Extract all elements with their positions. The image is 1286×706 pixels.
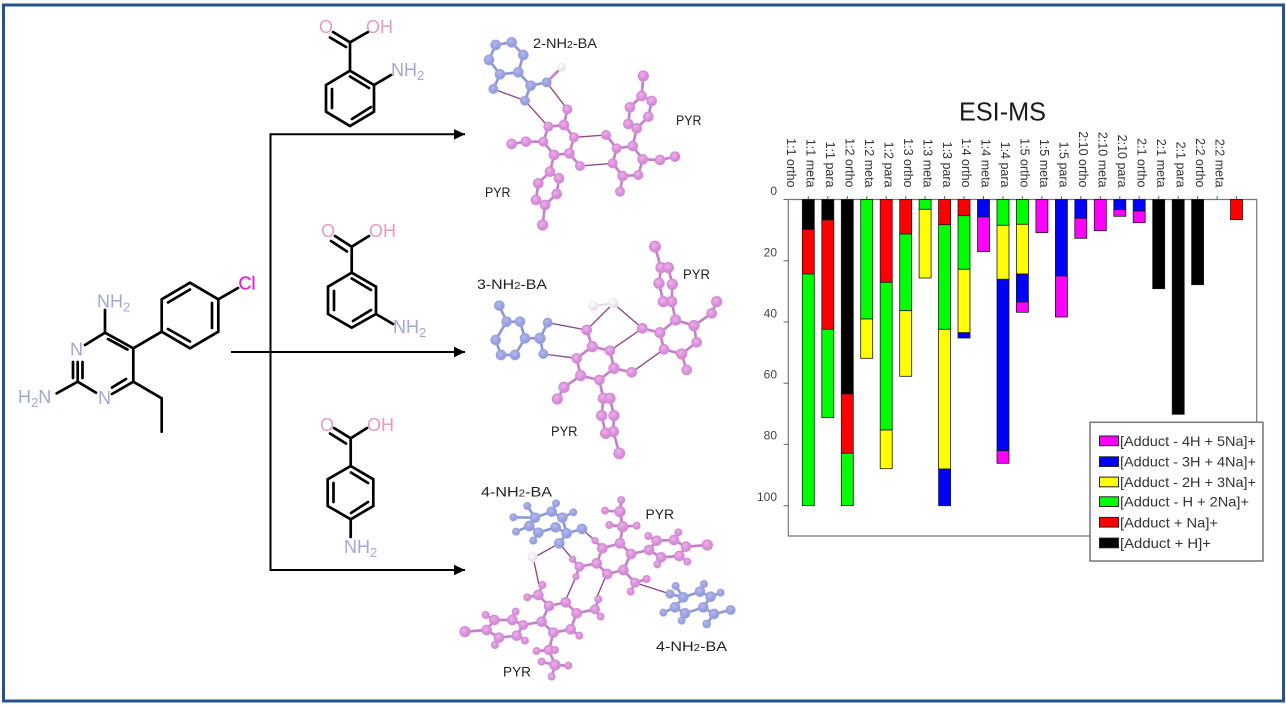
x axis labels: 2:1 meta [1154, 139, 1168, 188]
label: H2N: N [38, 387, 51, 407]
model: 3-NH2-BA with PYR dimer [491, 241, 722, 459]
label: NH2: 2 [417, 68, 424, 83]
chart: stacked bars ESI-MS [757, 131, 1257, 536]
x axis labels: 1:4 meta [979, 139, 993, 188]
label: PYR: PYR [551, 423, 578, 439]
bars [802, 200, 1242, 506]
label: NH2: 2 [419, 325, 426, 340]
x axis labels: 1:3 para [940, 142, 954, 188]
x axis labels: 1:5 ortho [1018, 138, 1032, 188]
x axis labels: 2:10 meta [1096, 132, 1110, 188]
label: O: O [320, 415, 334, 435]
x axis labels: 2:2 ortho [1193, 138, 1207, 188]
legend: Adduct + Na: [Adduct + Na]+ [1120, 514, 1218, 530]
legend: Adduct - H + 2Na: [Adduct - H + 2Na]+ [1120, 494, 1249, 510]
label: NH2: NH [393, 317, 419, 337]
y axis labels: 0 [770, 184, 777, 198]
label: PYR: PYR [676, 112, 702, 128]
plot frame [788, 200, 1257, 536]
x axis labels: 1:3 ortho [901, 138, 915, 188]
x axis labels: 1:1 para [823, 142, 837, 188]
x axis labels: 1:4 para [998, 142, 1012, 188]
y axis labels [757, 184, 777, 504]
reaction arrows [231, 129, 465, 575]
label: O: O [321, 221, 335, 241]
label: OH: OH [366, 17, 393, 37]
label: NH2: NH [344, 537, 370, 557]
molecule: 2-aminobenzoic acid [319, 17, 424, 126]
label: 3-NH2-BA: 3-NH 2-BA [477, 276, 548, 292]
label: NH2: 2 [123, 300, 130, 314]
y axis labels: 20 [764, 246, 777, 260]
x axis labels: 1:5 para [1057, 142, 1071, 188]
label: O: O [319, 17, 333, 37]
x axis labels: 2:2 meta [1212, 139, 1226, 188]
molecule: 4-aminobenzoic acid [320, 415, 394, 560]
chart legend [1090, 422, 1263, 561]
label: 4-NH2-BA lower: 4-NH 2-BA [656, 638, 728, 654]
x axis labels: 2:10 para [1115, 135, 1129, 188]
label: 2-NH2-BA: 2-NH2-BA [533, 35, 598, 51]
label: PYR: PYR [683, 266, 710, 282]
legend: Adduct - 2H + 3Na: [Adduct - 2H + 3Na]+ [1120, 474, 1256, 490]
model: two 4-NH2-BA with PYR dimer [460, 497, 735, 680]
x axis labels: 1:2 ortho [842, 138, 856, 188]
molecule: pyrimethamine [18, 274, 256, 432]
legend: Adduct - 4H + 5Na: [Adduct - 4H + 5Na]+ [1120, 433, 1256, 449]
y axis labels: 80 [764, 428, 777, 442]
x axis labels: 1:1 ortho [784, 138, 798, 188]
y axis labels: 40 [764, 306, 777, 320]
x axis labels: 1:4 ortho [959, 138, 973, 188]
label: NH2: 2 [370, 545, 377, 560]
label: OH: OH [367, 415, 394, 435]
label: PYR: PYR [646, 506, 674, 522]
legend: Adduct - 3H + 4Na: [Adduct - 3H + 4Na]+ [1120, 454, 1256, 470]
x axis labels: 2:1 para [1173, 142, 1187, 188]
x axis labels [784, 131, 1226, 188]
label: Cl: Cl [238, 274, 256, 294]
y axis labels: 60 [764, 368, 777, 382]
x axis labels: 1:3 meta [920, 139, 934, 188]
label: PYR: PYR [503, 664, 531, 680]
chart title: ESI-MS [959, 96, 1046, 126]
legend: Adduct + H: [Adduct + H]+ [1120, 535, 1211, 551]
label: OH: OH [369, 221, 396, 241]
label: N: N [70, 340, 83, 360]
label: PYR: PYR [485, 184, 510, 200]
x axis labels: 2:10 ortho [1076, 131, 1090, 188]
x axis labels: 1:2 meta [862, 139, 876, 188]
label: N: N [98, 388, 111, 408]
y axis labels: 100 [757, 490, 777, 504]
molecule: 3-aminobenzoic acid [321, 221, 426, 340]
x axis labels: 1:5 meta [1037, 139, 1051, 188]
x axis labels: 1:2 para [881, 142, 895, 188]
x axis labels: 2:1 ortho [1134, 138, 1148, 188]
axis ticks [784, 196, 1236, 506]
label: NH2: NH [97, 292, 123, 312]
label: 4-NH2-BA upper: 4-NH 2-BA [481, 484, 553, 500]
label: H2N: H [18, 387, 31, 407]
x axis labels: 1:1 meta [804, 139, 818, 188]
label: NH2: NH [391, 60, 417, 80]
model: 2-NH2-BA with PYR dimer [484, 38, 680, 230]
label: H2N: 2 [31, 395, 38, 410]
